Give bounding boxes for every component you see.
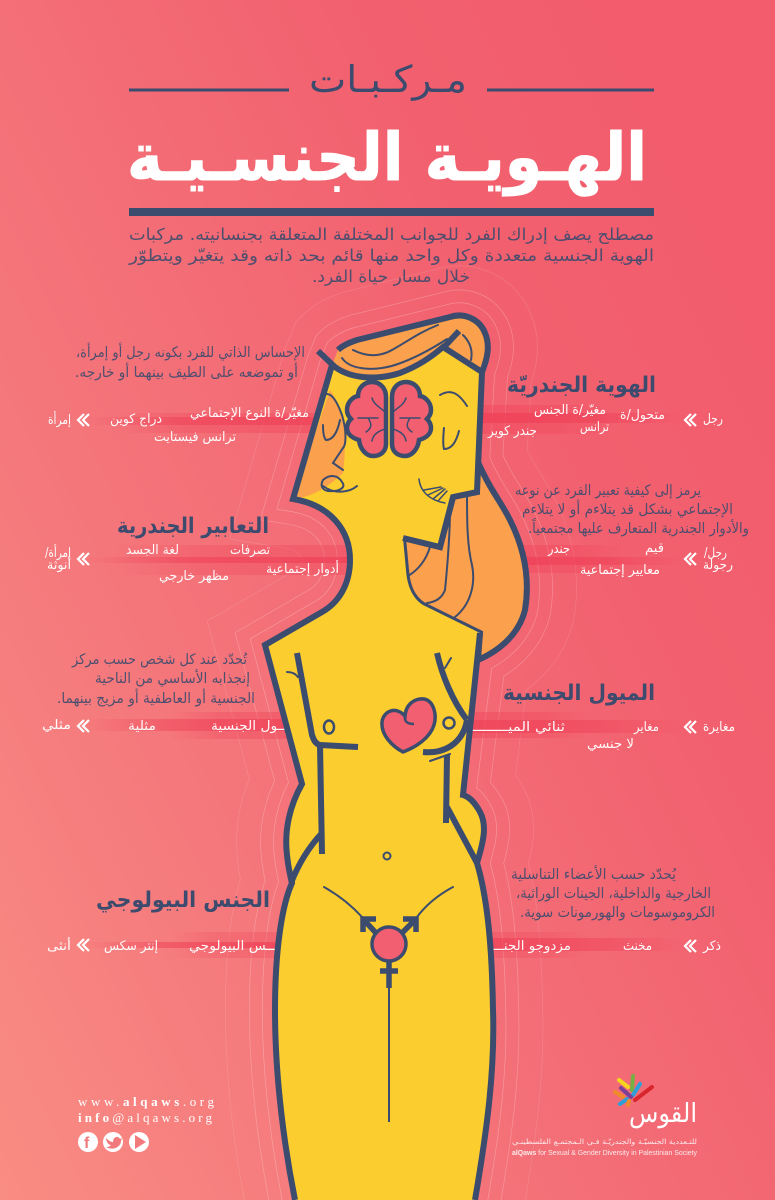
spectrum labels: مخنث: [623, 939, 652, 954]
spectrum labels: [487, 403, 723, 439]
arrow: [78, 939, 89, 951]
website: www. alqaws .org: [78, 1094, 214, 1109]
spectrum labels: مظهر خارجي: [159, 569, 229, 584]
spectrum labels: تصرفات: [230, 543, 270, 558]
spectrum labels: ترانس فيستايت: [154, 430, 236, 445]
arrow: [685, 553, 696, 565]
description: الخارجية والداخلية، الجينات الوراثية،: [516, 886, 711, 902]
spectrum labels: جندر: [547, 542, 570, 557]
section: sexual orientation (left description and labels): [42, 652, 310, 734]
spectrum labels: لغة الجسد: [126, 543, 179, 558]
intro paragraph: خلال مسار حياة الفرد.: [312, 267, 470, 287]
chin hatching: [419, 479, 447, 503]
brain: [347, 382, 431, 456]
arrow: [685, 940, 696, 952]
icon: facebook: f: [84, 1135, 90, 1152]
arrow: [685, 721, 696, 733]
spectrum labels: ترانس: [580, 420, 609, 435]
red spectrum bands: [85, 405, 685, 958]
spectrum labels: إمرأة/: [45, 544, 71, 561]
spectrum labels: مغيّر/ة النوع الإجتماعي: [190, 406, 309, 421]
email: info@alqaws.org: [78, 1110, 212, 1125]
section: biological sex (right description and labels): [475, 865, 721, 954]
icon: gender symbol: [363, 919, 416, 1122]
intro paragraph: الهوية الجنسية متعددة وكل واحد منها قائم بحد ذاته وقد يتغيّر ويتطوّر: [128, 246, 654, 266]
section: gender identity (right heading and labels): [487, 373, 723, 439]
right body outline: [463, 633, 493, 1200]
spectrum labels: أنثى: [47, 937, 71, 954]
description: الإجتماعي بشكل قد يتلاءم أو لا يتلاءم: [522, 499, 733, 518]
description: [57, 652, 255, 707]
spectrum labels: مغيّر/ة الجنس: [534, 403, 606, 418]
spectrum labels: ذكر: [702, 939, 721, 954]
spectrum labels: دراج كوين: [110, 412, 162, 427]
main title: الهـويـة الجنسـيـة: [127, 119, 647, 197]
icon: twitter: [103, 1132, 123, 1152]
description: الجنسية أو العاطفية أو مزيج بينهما.: [57, 688, 255, 707]
spectrum labels: رجل: [703, 412, 723, 427]
description: الإحساس الذاتي للفرد بكونه رجل أو إمرأة،: [76, 342, 305, 361]
arrow: [78, 414, 89, 426]
spectrum labels: مغايرة: [703, 720, 735, 735]
English tagline: alQaws for Sexual & Gender Diversity in Palestinian Society: [512, 1150, 697, 1157]
body halo contours: [207, 266, 577, 1200]
face lines: [322, 392, 467, 492]
description: إنجذابه الأساسي من الناحية: [95, 669, 250, 687]
body silhouette: [265, 347, 493, 1200]
spectrum labels: رجل/: [704, 546, 727, 561]
description: الكروموسومات والهورمونات سوية.: [520, 905, 715, 921]
section: gender identity (left description and labels): [48, 342, 309, 445]
navel: [384, 852, 390, 860]
section: biological sex (left heading and labels): [47, 888, 300, 954]
description: يُحدّد حسب الأعضاء التناسلية: [511, 865, 676, 883]
spectrum labels: الميـــول الجنسية: [211, 719, 310, 734]
spectrum labels: لا جنسي: [587, 737, 634, 752]
heading: الميول الجنسية: [503, 681, 655, 706]
spectrum labels: متحول/ة: [620, 408, 665, 423]
arm and chest lines: [291, 653, 477, 883]
spectrum labels: مثلية: [128, 719, 156, 734]
spectrum labels: أدوار إجتماعية: [266, 560, 339, 577]
long back hair: [403, 460, 527, 660]
heading: الجنس البيولوجي: [96, 888, 270, 913]
description: [75, 342, 305, 381]
description: والأدوار الجندرية المتعارف عليها مجتمعياً.: [528, 518, 749, 537]
logo wordmark: القوس: [629, 1099, 697, 1129]
spectrum labels: مثلي: [42, 718, 71, 733]
head and hair outline: [338, 315, 488, 547]
logo: alQaws: [512, 1076, 697, 1157]
intro paragraph: [128, 225, 654, 287]
arrow: [78, 720, 89, 732]
groin lines: [324, 887, 453, 917]
spectrum labels: [450, 720, 735, 752]
logo mark: [615, 1076, 652, 1105]
section: gender expression (right description and labels): [515, 483, 749, 578]
icon: play: [129, 1132, 149, 1152]
title rule: [129, 208, 654, 216]
description: أو تموضعه على الطيف بينهما أو خارجه.: [75, 362, 298, 381]
nipples: [324, 718, 454, 734]
spectrum labels: رجولة: [703, 558, 733, 573]
spectrum labels: [547, 541, 733, 578]
body outlines: [265, 365, 350, 1200]
spectrum labels: مزدوجو الجنـــس: [475, 939, 571, 954]
spectrum labels: ثنائي الميـــــــــول: [450, 720, 565, 735]
spectrum labels: [45, 543, 339, 584]
spectrum labels: جندر كوير: [487, 424, 537, 439]
description: [515, 483, 749, 537]
Arabic tagline: للتـعددية الجنسيّـة والجندريّـة فـي الـمجتمـع الفلسطينـي: [512, 1138, 697, 1146]
spectrum labels: [47, 937, 300, 954]
description: تُحدّد عند كل شخص حسب مركز: [71, 652, 247, 668]
face shadow: [293, 390, 345, 499]
arrow: [685, 414, 696, 426]
small lines: [287, 658, 451, 761]
description: [511, 865, 715, 921]
arrow: [78, 553, 89, 565]
figure: body illustration: [265, 315, 527, 1200]
footer contact: [78, 1094, 214, 1152]
hair strands: [342, 325, 473, 617]
spectrum labels: [42, 718, 310, 734]
description: يرمز إلى كيفية تعبير الفرد عن نوعه: [515, 483, 701, 499]
spectrum labels: أنوثة: [47, 556, 71, 573]
hairline: [318, 331, 482, 378]
heading: الهوية الجندريّة: [507, 373, 656, 398]
icon: heart: [382, 699, 435, 752]
heading: التعابير الجندرية: [117, 514, 269, 539]
spectrum labels: الجنـــس البيولوجي: [189, 939, 300, 954]
spectrum labels: قيم: [645, 541, 664, 556]
spectrum labels: إنتر سكس: [104, 939, 158, 954]
section: gender expression (left heading and labels): [45, 514, 339, 584]
spectrum labels: إمرأة: [48, 411, 71, 428]
supertitle: [129, 58, 654, 101]
section: sexual orientation (right heading and labels): [450, 681, 735, 752]
top hair: [332, 315, 488, 377]
spectrum labels: [475, 939, 721, 954]
spectrum labels: [48, 406, 309, 445]
spectrum labels: معايير إجتماعية: [580, 563, 660, 578]
supertitle: مـركـبـات: [309, 58, 467, 101]
intro paragraph: مصطلح يصف إدراك الفرد للجوانب المختلفة المتعلقة بجنسانيته. مركبات: [129, 225, 654, 245]
spectrum labels: مغاير: [633, 720, 659, 735]
